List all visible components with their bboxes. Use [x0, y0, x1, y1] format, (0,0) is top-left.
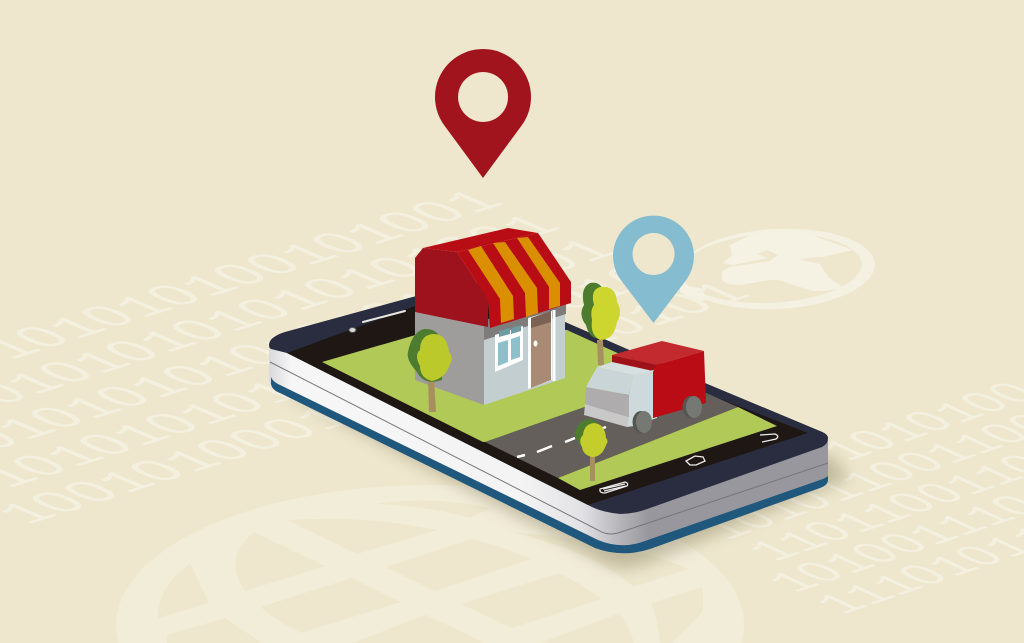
binary text: right block [609, 375, 1024, 622]
globe: large lower watermark [116, 485, 744, 643]
globe: upper right watermark [677, 224, 877, 314]
truck rear wheel [682, 396, 702, 418]
screen grass [322, 325, 670, 442]
speaker [363, 311, 405, 322]
phone shadow [278, 388, 850, 568]
truck [584, 341, 706, 433]
camera [349, 328, 356, 332]
roof side [415, 248, 488, 327]
awning [457, 233, 571, 328]
truck box side [653, 351, 706, 418]
tree behind truck [581, 283, 620, 366]
screen grass upper right [440, 322, 670, 442]
icon: back button [760, 434, 778, 442]
tree on road [575, 419, 608, 481]
phone screen bezel [287, 293, 808, 505]
truck box front [612, 355, 656, 374]
truck cab side [627, 369, 657, 427]
phone blue base stripe [271, 377, 828, 553]
door [528, 310, 554, 389]
icon: blue location pin [613, 216, 694, 323]
store front wall [484, 305, 565, 405]
window [495, 325, 523, 372]
roof top [423, 228, 538, 252]
road dashes [517, 427, 606, 457]
truck cab front [586, 367, 633, 395]
icon: menu button [600, 482, 628, 493]
truck cab grille [585, 387, 629, 417]
store left wall [415, 310, 484, 405]
smartphone [269, 281, 828, 553]
truck front wheel [632, 411, 652, 433]
truck bumper [584, 404, 629, 427]
awning stripes [468, 237, 560, 323]
road [485, 377, 738, 478]
phone top face [269, 281, 828, 514]
icon: home button [686, 456, 705, 465]
truck cab top [597, 362, 653, 375]
truck box top [612, 341, 704, 365]
icon: red location pin [435, 49, 531, 178]
shadow under awning [484, 300, 566, 340]
store [415, 228, 571, 405]
binary text: left block: 1001010001010101010101 [0, 275, 770, 532]
phone seam line [270, 362, 828, 534]
tree left of store [408, 329, 452, 412]
phone side [269, 345, 828, 553]
lower grass [558, 407, 777, 490]
